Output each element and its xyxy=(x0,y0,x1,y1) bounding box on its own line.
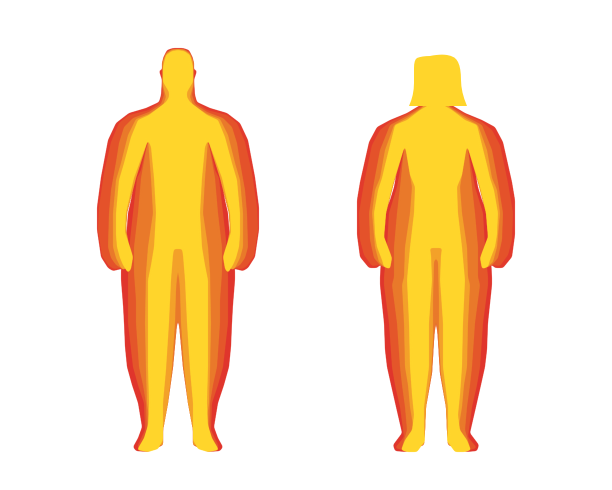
male yellow body xyxy=(116,50,240,452)
male torso orange layer xyxy=(134,100,222,451)
male torso outer red layer xyxy=(121,100,235,452)
female torso light orange layer xyxy=(402,100,470,445)
female torso dark orange layer xyxy=(384,100,488,451)
female torso orange layer xyxy=(392,100,480,451)
male arm dark orange layer xyxy=(98,49,258,270)
female arm red layer xyxy=(357,100,515,268)
female hair xyxy=(409,55,467,106)
male figure xyxy=(97,48,259,452)
male torso dark orange layer xyxy=(128,100,228,451)
female torso outer red layer xyxy=(380,100,492,452)
female figure xyxy=(357,55,515,452)
male arm light orange layer xyxy=(113,49,243,270)
female arm dark orange layer xyxy=(359,100,513,268)
female yellow body xyxy=(374,100,498,452)
male arm red layer xyxy=(97,48,259,271)
male torso light orange layer xyxy=(145,100,211,445)
male arm orange layer xyxy=(108,49,248,270)
female arm orange layer xyxy=(369,100,503,268)
female arm light orange layer xyxy=(372,100,500,268)
